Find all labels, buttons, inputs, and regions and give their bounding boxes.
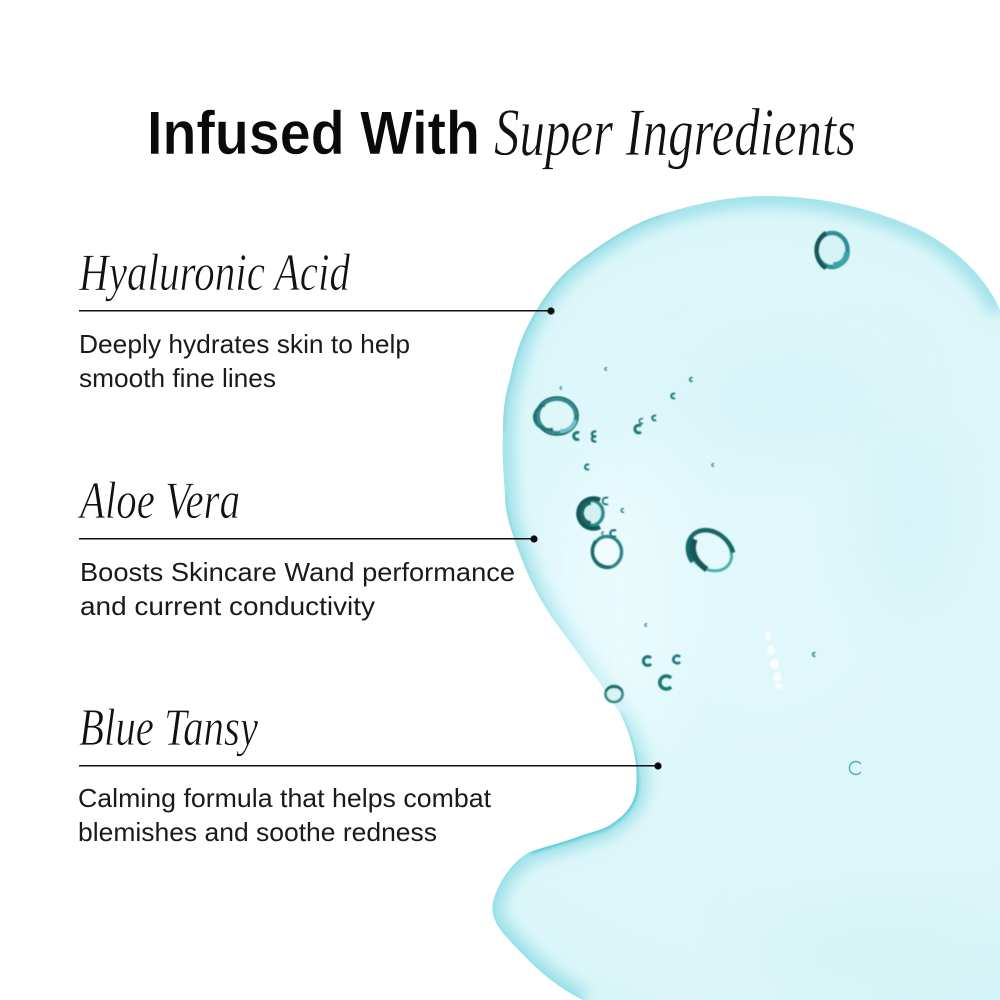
title: Infused With (147, 99, 480, 167)
title (147, 94, 856, 170)
pointer line with dot (79, 535, 538, 543)
title: Super Ingredients (494, 94, 856, 170)
bubble: mid left pair (578, 499, 622, 568)
highlight: light reflection (765, 631, 783, 689)
heading: Blue Tansy: Blue Tansy (79, 699, 258, 757)
small bubbles (560, 368, 816, 689)
blob: blue serum gel (492, 196, 1000, 1000)
bubble: centre large (680, 522, 740, 580)
bubble: edge lower (606, 686, 622, 702)
description: Deeply hydrates skin to help (79, 329, 410, 359)
description: smooth fine lines (79, 363, 276, 393)
bubble: left large (534, 397, 578, 435)
description: Boosts Skincare Wand performance (80, 557, 515, 587)
heading: Aloe Vera: Aloe Vera (78, 472, 240, 530)
ingredient: Hyaluronic Acid (78, 244, 555, 393)
pointer line with dot (79, 762, 662, 770)
ingredient: Blue Tansy (78, 699, 662, 847)
heading: Hyaluronic Acid: Hyaluronic Acid (78, 244, 350, 302)
description (80, 557, 515, 621)
ingredient: Aloe Vera (78, 472, 538, 621)
description: Calming formula that helps combat (78, 783, 492, 813)
description: blemishes and soothe redness (78, 817, 437, 847)
description (78, 783, 492, 847)
description: and current conductivity (80, 591, 375, 621)
bubble: thin ring (849, 762, 861, 775)
pointer line with dot (79, 307, 555, 315)
description (79, 329, 410, 393)
bubble: top right (816, 233, 848, 268)
